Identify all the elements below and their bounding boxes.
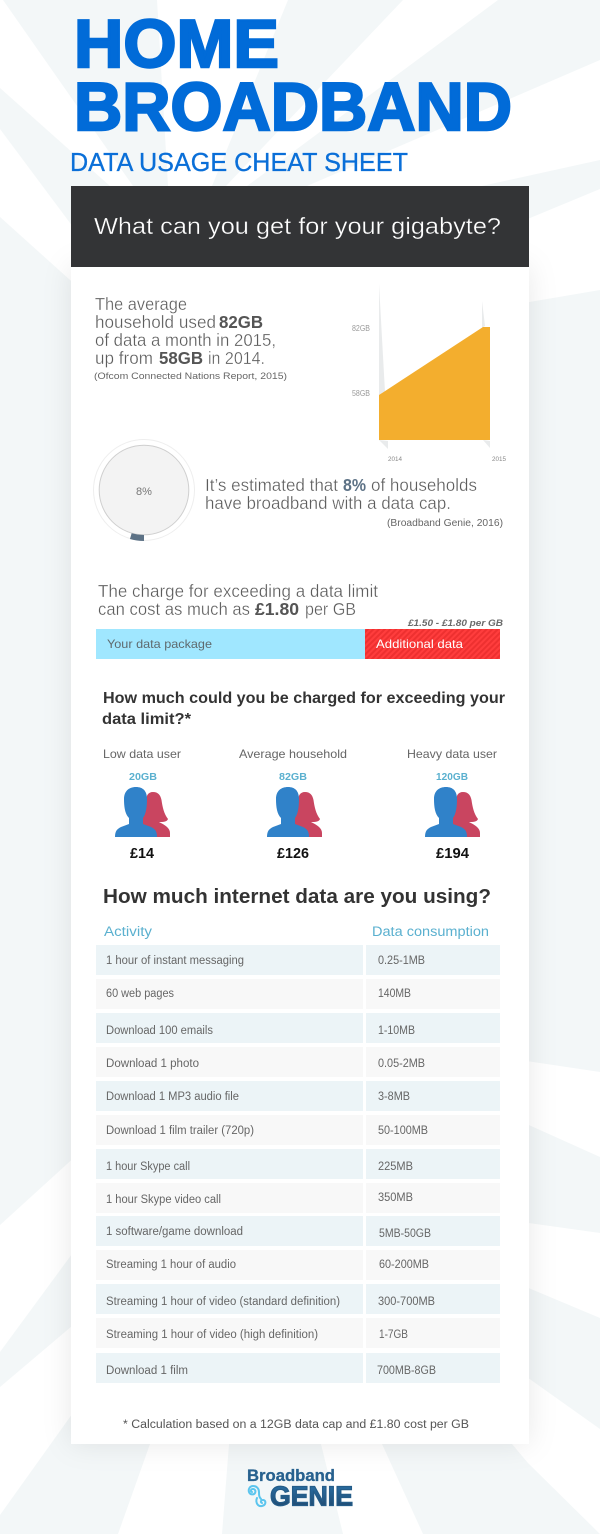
- text block: exceeding charge: can cost as much as: [98, 599, 250, 619]
- row: streaming standard definition: 300-700MB: [378, 1296, 435, 1308]
- row: Skype video call: 1 hour Skype video call: [106, 1194, 221, 1206]
- heading: internet data: How much internet data are you using?: [103, 886, 491, 908]
- row: emails: 1-10MB: [378, 1025, 415, 1037]
- donut gauge: 8 percent: [94, 440, 194, 540]
- title: BROADBAND: [74, 69, 512, 145]
- user type: average household: [239, 747, 347, 862]
- user type: average household: Average household: [239, 747, 347, 761]
- text block: data cap households: have broadband with a data cap.: [205, 493, 451, 513]
- row: software download: [96, 1216, 500, 1246]
- row: film trailer: [96, 1115, 500, 1145]
- row: web pages: [96, 979, 500, 1009]
- table column headers: [104, 924, 489, 939]
- row: streaming audio: 60-200MB: [379, 1259, 429, 1271]
- row: instant messaging: 1 hour of instant messaging: [106, 955, 244, 967]
- area chart: household data 2014 to 2015: 2014: [388, 456, 402, 463]
- user type: average household: 82GB: [279, 772, 307, 783]
- donut gauge: 8 percent: 8%: [136, 486, 152, 498]
- text block: average household usage: 58GB: [159, 348, 203, 368]
- data package bar: Additional data: [376, 637, 463, 651]
- subtitle: DATA USAGE CHEAT SHEET: [70, 147, 408, 177]
- price range label: £1.50 - £1.80 per GB: [407, 618, 503, 629]
- row: instant messaging: 0.25-1MB: [378, 955, 425, 967]
- user type: heavy data user: 120GB: [436, 772, 468, 783]
- text block: data cap households: (Broadband Genie, 2016): [387, 518, 503, 529]
- user type: low data user: Low data user: [103, 747, 181, 761]
- area chart: household data 2014 to 2015: 82GB: [352, 324, 370, 333]
- user type: heavy data user: Heavy data user: [407, 747, 497, 761]
- row: instant messaging: [96, 945, 500, 975]
- row: streaming standard definition: [96, 1284, 500, 1314]
- data package bar: Your data package: [107, 637, 212, 651]
- area chart: household data 2014 to 2015: [352, 284, 506, 463]
- row: MP3: Download 1 MP3 audio file: [106, 1091, 239, 1103]
- row: Skype call: 225MB: [378, 1161, 413, 1173]
- text block: exceeding charge: [98, 581, 378, 619]
- dark header banner: What can you get for your gigabyte?: [94, 213, 501, 239]
- text block: data cap households: It’s estimated that: [205, 475, 338, 495]
- row: film download: [96, 1353, 500, 1383]
- heading: exceeding charge: How much could you be charged for exceeding your: [103, 690, 505, 707]
- row: emails: [96, 1013, 500, 1043]
- row: emails: Download 100 emails: [106, 1025, 213, 1037]
- white content card: [71, 266, 529, 1444]
- row: MP3: 3-8MB: [378, 1091, 410, 1103]
- heading: exceeding charge: [102, 690, 505, 728]
- row: software download: 1 software/game download: [106, 1226, 243, 1238]
- text block: average household usage: [94, 294, 287, 382]
- area chart: household data 2014 to 2015: 58GB: [352, 389, 370, 398]
- text block: average household usage: household used: [95, 312, 216, 332]
- user type: low data user: 20GB: [129, 772, 157, 783]
- text block: data cap households: 8%: [343, 475, 366, 495]
- text block: average household usage: 82GB: [219, 312, 263, 332]
- row: film download: Download 1 film: [106, 1365, 188, 1377]
- row: streaming standard definition: Streaming 1 hour of video (standard definition): [106, 1296, 340, 1308]
- dark header banner: [71, 186, 529, 267]
- row: Skype video call: 350MB: [378, 1192, 413, 1204]
- title: HOME: [74, 6, 279, 82]
- user type: heavy data user: £194: [436, 845, 470, 862]
- row: Skype call: [96, 1149, 500, 1179]
- heading: exceeding charge: data limit?*: [102, 711, 192, 728]
- table column headers: Activity: [104, 924, 152, 939]
- text block: data cap households: of households: [371, 475, 477, 495]
- Broadband Genie logo: [247, 1467, 353, 1512]
- row: streaming high definition: Streaming 1 hour of video (high definition): [106, 1329, 318, 1341]
- text block: average household usage: in 2014.: [208, 348, 265, 368]
- row: film download: 700MB-8GB: [377, 1365, 436, 1377]
- row: streaming high definition: [96, 1318, 500, 1348]
- user type: average household: £126: [277, 845, 309, 862]
- user type: low data user: [103, 747, 181, 862]
- row: streaming high definition: 1-7GB: [379, 1329, 408, 1341]
- row: film trailer: Download 1 film trailer (720p): [106, 1125, 254, 1137]
- area chart: household data 2014 to 2015: 2015: [492, 456, 506, 463]
- row: Skype video call: [96, 1183, 500, 1213]
- user type: low data user: £14: [130, 845, 155, 862]
- text block: average household usage: The average: [95, 294, 187, 314]
- row: film trailer: 50-100MB: [378, 1125, 428, 1137]
- row: MP3: [96, 1081, 500, 1111]
- row: streaming audio: [96, 1250, 500, 1280]
- row: photo: Download 1 photo: [106, 1058, 199, 1070]
- user type: heavy data user: [407, 747, 497, 862]
- text block: data cap households: [205, 475, 503, 529]
- text block: exceeding charge: per GB: [305, 599, 356, 619]
- row: photo: 0.05-2MB: [378, 1058, 425, 1070]
- data package bar: [96, 629, 500, 659]
- Broadband Genie logo: GENIE: [270, 1480, 353, 1512]
- Broadband Genie logo: Broadband: [247, 1467, 335, 1485]
- text block: average household usage: of data a month in 2015,: [95, 330, 276, 350]
- text block: exceeding charge: £1.80: [255, 599, 299, 619]
- row: web pages: 140MB: [378, 988, 411, 1000]
- row: streaming audio: Streaming 1 hour of audio: [106, 1259, 236, 1271]
- table column headers: Data consumption: [372, 924, 489, 939]
- text block: average household usage: (Ofcom Connected Nations Report, 2015): [94, 371, 287, 382]
- row: Skype call: 1 hour Skype call: [106, 1161, 190, 1173]
- text block: exceeding charge: The charge for exceeding a data limit: [98, 581, 378, 601]
- footnote: * Calculation based on a 12GB data cap and £1.80 cost per GB: [123, 1419, 469, 1431]
- text block: average household usage: up from: [95, 348, 153, 368]
- title: [74, 6, 512, 145]
- row: photo: [96, 1047, 500, 1077]
- row: web pages: 60 web pages: [106, 988, 174, 1000]
- row: software download: 5MB-50GB: [379, 1228, 431, 1240]
